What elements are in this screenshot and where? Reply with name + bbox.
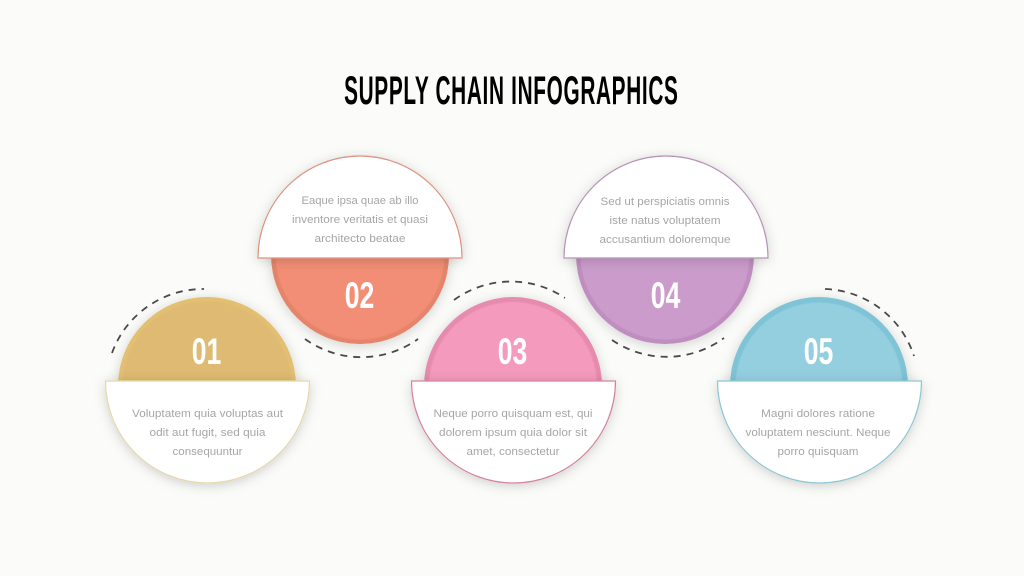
white half disc 01: [106, 381, 310, 483]
step 05: [718, 289, 922, 483]
white half disc 03: [412, 381, 616, 483]
description 05: voluptatem nesciunt. Neque: [746, 427, 890, 439]
description 04: Sed ut perspiciatis omnis: [600, 196, 730, 208]
description 03: Neque porro quisquam est, qui: [434, 408, 592, 420]
colored circle 03: [424, 297, 602, 475]
colored circle 01: [118, 297, 296, 475]
dashed arc 02: [305, 339, 418, 357]
description 03: dolorem ipsum quia dolor sit: [439, 427, 587, 439]
description 05: [746, 408, 890, 458]
description 04: iste natus voluptatem: [610, 215, 720, 227]
colored circle 04: [576, 166, 754, 344]
white half disc 02: [258, 156, 462, 258]
description 02: [292, 195, 428, 245]
number 01: 01: [192, 331, 221, 372]
description 01: consequuntur: [172, 446, 243, 458]
colored circle 05: [730, 297, 908, 475]
description 02: Eaque ipsa quae ab illo: [302, 195, 418, 207]
dashed arc 04: [612, 338, 724, 357]
number 02: 02: [345, 275, 374, 316]
description 04: [600, 196, 730, 246]
description 02: inventore veritatis et quasi: [292, 214, 428, 226]
step 03: [412, 282, 616, 483]
description 04: accusantium doloremque: [600, 234, 730, 246]
description 05: porro quisquam: [778, 446, 858, 458]
step 02: [258, 156, 462, 357]
description 03: amet, consectetur: [466, 446, 560, 458]
number 05: 05: [804, 331, 833, 372]
dashed arc 05: [825, 289, 914, 356]
description 01: odit aut fugit, sed quia: [150, 427, 266, 439]
white half disc 04: [564, 156, 768, 258]
title: SUPPLY CHAIN INFOGRAPHICS: [344, 68, 678, 113]
step 04: [564, 156, 768, 357]
dashed arc 01: [112, 289, 204, 353]
description 02: architecto beatae: [314, 233, 406, 245]
description 01: [132, 408, 283, 458]
step 01: [106, 289, 310, 483]
number 03: 03: [498, 331, 527, 372]
description 01: Voluptatem quia voluptas aut: [132, 408, 283, 420]
colored circle 02: [271, 166, 449, 344]
white half disc 05: [718, 381, 922, 483]
description 05: Magni dolores ratione: [761, 408, 875, 420]
number 04: 04: [651, 275, 680, 316]
dashed arc 03: [454, 282, 565, 300]
description 03: [434, 408, 592, 458]
